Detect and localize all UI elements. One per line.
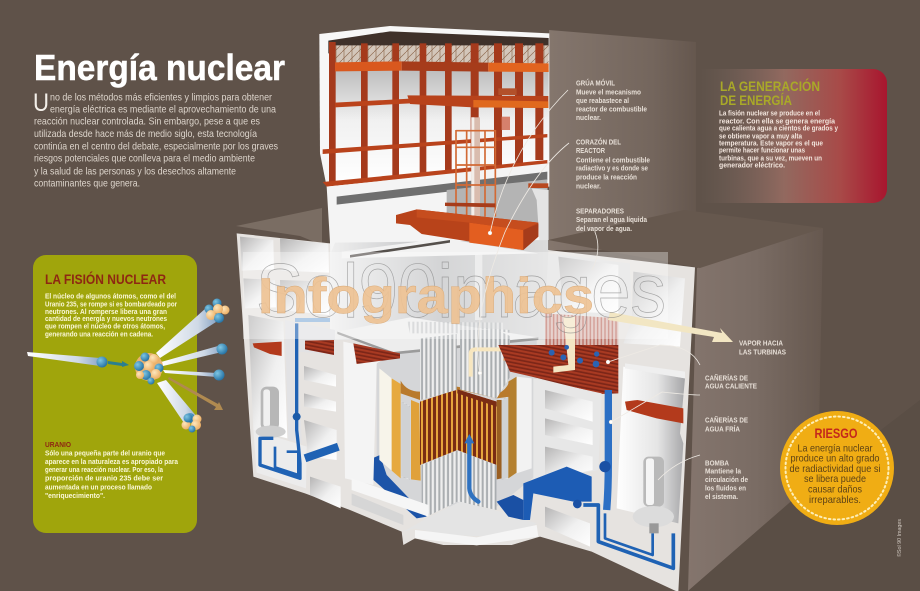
- hall walls: [319, 26, 549, 193]
- generation text: permite hacer funcionar unas: [719, 146, 805, 154]
- labels: crane, core, separators: nuclear.: [576, 182, 601, 190]
- intro text block: [33, 89, 278, 190]
- core arrow: cold water rising: [469, 443, 478, 502]
- fission diagram: [27, 298, 230, 432]
- stepped base: [352, 478, 428, 525]
- labels: steam, pipes, pump: [705, 338, 786, 501]
- atom fragment top: [204, 298, 230, 323]
- intro text block: no de los métodos más eficientes y limpios para obtener: [50, 92, 272, 104]
- generation text: temperatura. Este vapor es el que: [719, 138, 823, 148]
- reactor plate: [337, 317, 538, 355]
- labels: crane, core, separators: CORAZÓN DEL: [576, 138, 621, 146]
- labels: crane, core, separators: reactor de combustible: [576, 104, 647, 114]
- fission text: neutrones. Al romperse libera una gran: [45, 307, 167, 316]
- labels: steam, pipes, pump: BOMBA: [705, 458, 730, 468]
- title: Energía nuclear: [34, 47, 285, 88]
- intro text block: contaminantes que genera.: [34, 178, 140, 190]
- labels: crane, core, separators: produce la reacción: [576, 172, 637, 182]
- reactor building lower section: [237, 230, 695, 591]
- reactor cavity: [377, 340, 537, 507]
- labels: steam, pipes, pump: VAPOR HACIA: [739, 338, 784, 348]
- watermark text: Sol90images: [256, 249, 666, 334]
- watermark text: Infographics: [258, 268, 594, 324]
- labels: steam, pipes, pump: Mantiene la: [705, 466, 742, 476]
- riesgo text: causar daños: [808, 484, 862, 496]
- labels: steam, pipes, pump: circulación de: [705, 475, 748, 484]
- space below the hall: [330, 230, 548, 340]
- labels: crane, core, separators: GRÚA MÓVIL: [576, 78, 615, 88]
- uranio text: proporción de uranio 235 debe ser: [45, 474, 163, 482]
- fission text: generando una reacción en cadena.: [45, 330, 153, 338]
- lower crane carriage: [396, 209, 538, 250]
- steam line in the core: [471, 349, 517, 377]
- left red pipes by the core: [353, 343, 400, 364]
- incoming neutron beam: [27, 352, 100, 366]
- steam pipe to the turbines: [608, 312, 733, 342]
- concrete shell: [237, 233, 695, 591]
- riesgo text: de radiactividad que si: [790, 464, 880, 475]
- labels: crane, core, separators: que reabastece al: [576, 96, 629, 105]
- generation text: generador eléctrico.: [719, 160, 785, 170]
- upper rods through the plate: [420, 334, 457, 400]
- labels: crane, core, separators: REACTOR: [576, 146, 606, 155]
- central nucleus: [134, 352, 164, 384]
- riesgo text: produce un alto grado: [790, 454, 880, 464]
- uranio text: generar una reacción nuclear. Por eso, la: [45, 465, 164, 474]
- reactor core assembly: [368, 327, 537, 518]
- roof trusses: [328, 31, 549, 53]
- uranio text: aparece en la naturaleza es apropiado para: [45, 457, 179, 466]
- labels: crane, core, separators: Contiene el combustible: [576, 156, 650, 164]
- red steam separator block: [498, 313, 618, 394]
- right upper rooms: [545, 253, 685, 523]
- labels: crane, core, separators: nuclear.: [576, 113, 601, 122]
- intro text block: energía eléctrica es mediante el aprovechamiento de una: [50, 104, 276, 116]
- right pump: [633, 457, 674, 533]
- core base floor: [403, 502, 537, 536]
- steel beams: [323, 61, 549, 187]
- building roof and walls backdrop: [236, 30, 920, 591]
- right blue pipes: [583, 390, 673, 568]
- riesgo text: irreparables.: [809, 495, 861, 506]
- fuel rods lower: [422, 451, 457, 515]
- intro text block: continúa en el centro del debate, especialmente por los graves: [34, 142, 278, 152]
- intro text block: reacción nuclear controlada. Sin embargo, pese a que es: [34, 116, 260, 128]
- truss row: [331, 45, 549, 63]
- fuel core: [420, 389, 457, 465]
- fission text: Uranio 235, se rompe si es bombardeado por: [45, 300, 177, 308]
- neutrons: [216, 344, 228, 354]
- labels: crane, core, separators: Separan el agua líquida: [576, 215, 648, 224]
- right red crane: [625, 400, 683, 423]
- energy arrow: [168, 377, 223, 410]
- generation text: reactor. Con ella se genera energía: [719, 116, 836, 126]
- generation text: [719, 108, 838, 170]
- fission text: [45, 292, 177, 338]
- heading: la generación de energía: DE ENERGÍA: [720, 92, 792, 108]
- labels: crane, core, separators: [576, 78, 650, 233]
- labels: steam, pipes, pump: CAÑERÍAS DE: [705, 416, 748, 424]
- riesgo text: [790, 444, 880, 506]
- intro text block: riesgos potenciales que conlleva para el medio ambiente: [34, 154, 255, 164]
- labels: crane, core, separators: Mueve el mecanismo: [576, 88, 641, 96]
- uranio text: "enriquecimiento".: [45, 491, 105, 500]
- intro text block: utilizada desde hace más de medio siglo, esta tecnología: [34, 129, 257, 140]
- heading: la generación de energía: [720, 77, 820, 108]
- left shaft rooms: [240, 237, 341, 508]
- atom fragment bottom: [182, 413, 202, 432]
- pillar: [532, 188, 549, 240]
- heading: la generación de energía: LA GENERACIÓN: [720, 77, 820, 94]
- overhead crane bridge: [407, 88, 548, 130]
- outgoing beams: [156, 308, 216, 358]
- intro text block: y la salud de las personas y los desechos altamente: [34, 166, 236, 178]
- heading: la fisión nuclear: LA FISIÓN NUCLEAR: [45, 272, 166, 287]
- labels: crane, core, separators: radiactivo y es donde se: [576, 164, 648, 172]
- generation text: La fisión nuclear se produce en el: [719, 108, 820, 118]
- lower wall and grey band: [327, 163, 547, 258]
- fuel rods upper: [420, 332, 457, 400]
- credit: ©Sol 90 Images: [896, 519, 903, 557]
- generation text: turbinas, que a su vez, mueven un: [719, 154, 822, 162]
- labels: steam, pipes, pump: LAS TURBINAS: [739, 348, 786, 356]
- fission text: cantidad de energía y nuevos neutrones: [45, 314, 167, 323]
- riesgo text: se libera puede: [804, 474, 866, 485]
- bays behind the steel frame: [331, 70, 549, 183]
- uranio text: Sólo una pequeña parte del uranio que: [45, 448, 165, 458]
- labels: crane, core, separators: SEPARADORES: [576, 206, 624, 216]
- refuelling mast: [445, 117, 495, 217]
- left pump: [256, 387, 286, 438]
- right blue duct: [497, 467, 592, 520]
- riesgo heading: RIESGO: [814, 425, 858, 441]
- uranio heading: URANIO: [45, 440, 71, 449]
- labels: crane, core, separators: del vapor de agua.: [576, 224, 632, 233]
- labels: steam, pipes, pump: los fluidos en: [705, 484, 746, 492]
- central thick wall: [343, 342, 393, 485]
- fission text: que rompen el núcleo de otros átomos,: [45, 322, 165, 331]
- generation text: que calienta agua a cientos de grados y: [719, 124, 838, 132]
- upper reactor hall: [319, 26, 549, 258]
- labels: steam, pipes, pump: AGUA CALIENTE: [705, 382, 757, 390]
- panel: la generación de energía: [700, 69, 887, 203]
- generation text: se obtiene vapor a muy alta: [719, 132, 803, 140]
- uranio text: [45, 448, 179, 500]
- fission text: El núcleo de algunos átomos, como el del: [45, 292, 176, 300]
- panel: la fisión nuclear: [33, 255, 197, 533]
- callout: riesgo: [780, 411, 894, 525]
- left red crane: [253, 342, 282, 356]
- side shields left: [379, 368, 392, 471]
- riesgo text: La energía nuclear: [798, 444, 873, 454]
- left red pipes: [305, 340, 334, 355]
- watermark band: [243, 252, 668, 339]
- steel columns: [329, 42, 543, 184]
- labels: steam, pipes, pump: AGUA FRÍA: [705, 424, 741, 434]
- mast stem under carriage: [475, 230, 482, 320]
- side shields right: [497, 400, 502, 479]
- labels: steam, pipes, pump: el sistema.: [705, 492, 738, 501]
- right shelves: [533, 378, 602, 547]
- leader lines: [478, 90, 700, 480]
- left blue pipes: [260, 320, 338, 478]
- blue base duct: [368, 455, 427, 518]
- bowl: [401, 380, 510, 400]
- drop cap: U: [33, 89, 49, 117]
- labels: steam, pipes, pump: CAÑERÍAS DE: [705, 374, 748, 382]
- uranio text: aumentada en un proceso llamado: [45, 482, 153, 492]
